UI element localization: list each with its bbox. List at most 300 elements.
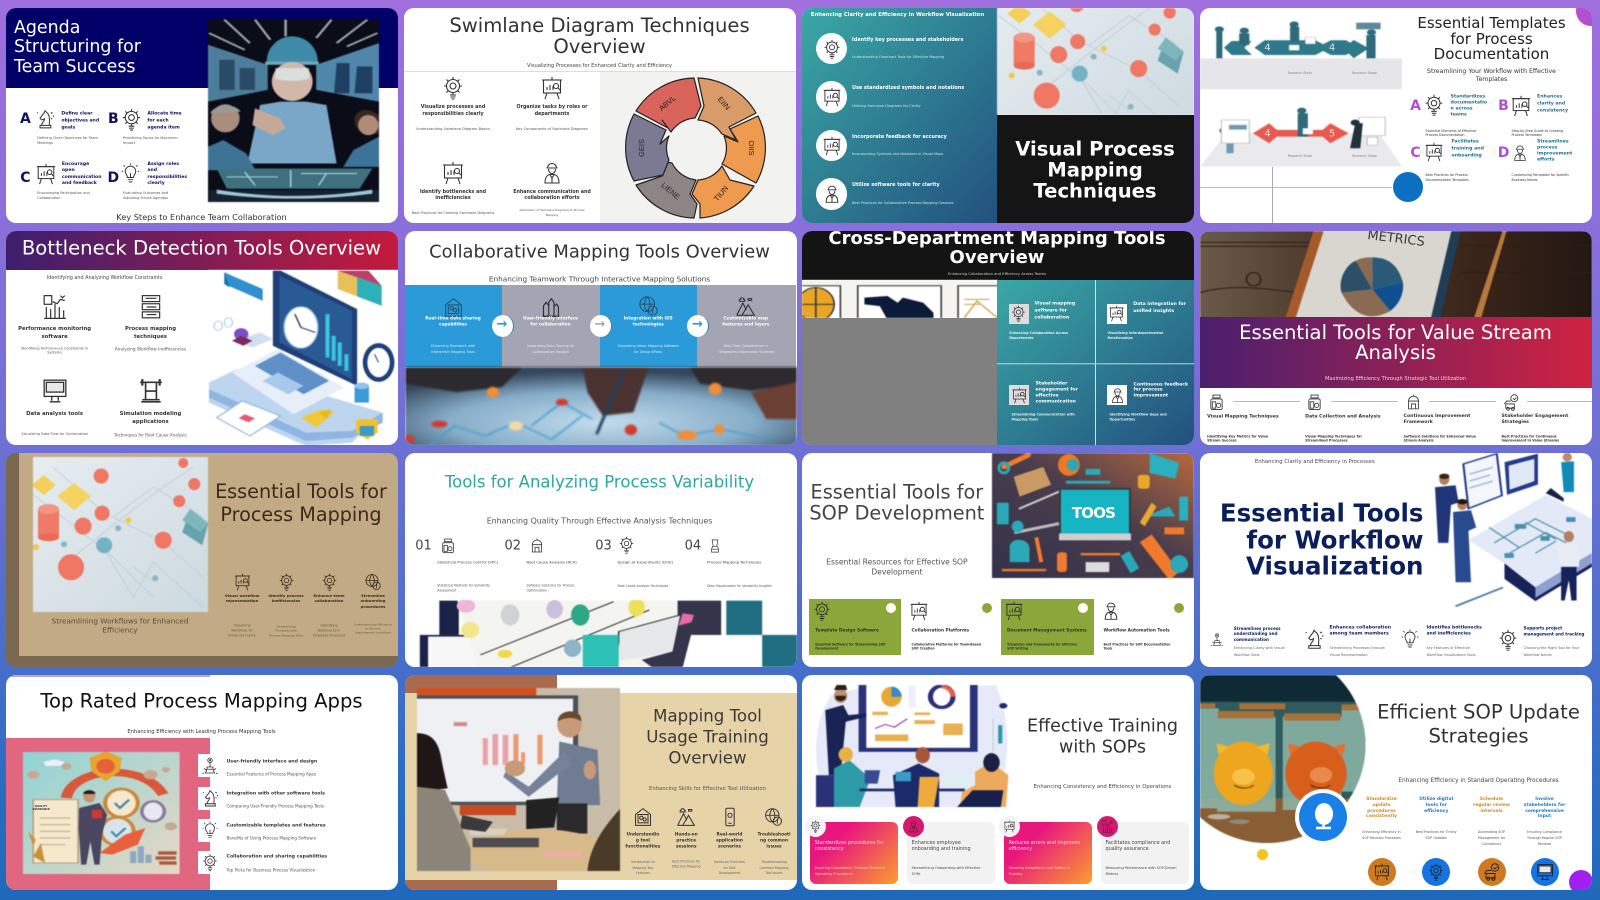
item heading: communication bbox=[1036, 399, 1076, 404]
item heading: consistency bbox=[1537, 108, 1568, 114]
column caption: Geographic Information Systems bbox=[718, 350, 774, 354]
item caption: Analyzing Workflow Inefficiencies bbox=[115, 347, 186, 352]
item heading: collaboration bbox=[1034, 316, 1069, 320]
document label bbox=[32, 805, 50, 811]
item 2 bbox=[106, 294, 196, 360]
icon circle bbox=[816, 178, 847, 210]
column caption: for Group Efforts bbox=[634, 350, 662, 354]
icon backing bbox=[198, 819, 210, 842]
icon: chess knight bbox=[36, 110, 54, 128]
globe icon bbox=[1313, 803, 1334, 831]
panel heading: Enhancing Clarity and Efficiency in Workflow Visualization bbox=[811, 12, 984, 18]
item caption: Management for bbox=[1478, 836, 1505, 840]
icon bbox=[528, 538, 546, 554]
item heading bbox=[1366, 797, 1397, 820]
item heading bbox=[675, 832, 698, 851]
item caption: Visualizing bbox=[233, 623, 250, 627]
item heading: Data Collection and Analysis bbox=[1305, 414, 1381, 420]
icon bbox=[735, 296, 756, 317]
top strip bbox=[6, 675, 210, 677]
item heading: Utilize digital bbox=[1419, 797, 1453, 802]
card heading: consistency bbox=[815, 847, 844, 853]
card heading: Facilitates compliance and bbox=[1106, 840, 1170, 846]
title: for Workflow bbox=[1246, 525, 1424, 554]
column heading: Real-time data sharing bbox=[425, 316, 481, 321]
icon bbox=[1400, 629, 1420, 650]
icon bbox=[1302, 629, 1324, 650]
icon bbox=[320, 573, 338, 591]
icon bbox=[540, 297, 561, 318]
item caption: Choosing the Right Tool for Your bbox=[1524, 646, 1579, 650]
item heading: update bbox=[1373, 803, 1390, 808]
icon bbox=[907, 820, 920, 833]
item caption: for Skill bbox=[724, 866, 735, 870]
card heading: quality assurance bbox=[1106, 847, 1149, 853]
item caption: Identifying bbox=[321, 623, 337, 627]
item heading: efficiency bbox=[1424, 809, 1448, 814]
item 2 bbox=[1305, 394, 1395, 444]
item heading bbox=[1134, 382, 1188, 399]
card caption: SOPs bbox=[912, 872, 920, 876]
item 2 bbox=[198, 787, 378, 810]
item caption: Mapping Tools bbox=[1012, 418, 1038, 422]
icon circle bbox=[1097, 816, 1118, 837]
item caption: Best Practices for Continuous bbox=[1502, 434, 1557, 438]
subtitle bbox=[52, 618, 188, 635]
item heading: procedures bbox=[361, 604, 385, 608]
icon bbox=[1101, 820, 1114, 833]
item caption: Process Templates bbox=[1512, 132, 1542, 136]
item heading: open bbox=[62, 168, 75, 173]
item heading: communication bbox=[1234, 637, 1269, 642]
item heading: and bbox=[147, 168, 157, 173]
item caption: Collaboration bbox=[37, 196, 61, 200]
subtitle: Maximizing Efficiency Through Strategic Tool Utilization bbox=[1325, 376, 1466, 382]
item heading bbox=[1419, 797, 1453, 814]
icon bbox=[442, 297, 464, 318]
item heading bbox=[18, 325, 91, 341]
icon bbox=[1108, 305, 1125, 322]
item heading: effective bbox=[1036, 393, 1059, 398]
title: Visualization bbox=[1246, 552, 1424, 581]
icon bbox=[708, 538, 722, 554]
item heading: responsibilities bbox=[147, 175, 187, 180]
image: isometric laptop dashboard bbox=[208, 270, 398, 446]
item heading: Assign roles bbox=[147, 162, 179, 167]
item heading: Incorporate feedback for accuracy bbox=[852, 134, 947, 140]
title bbox=[1417, 16, 1566, 62]
item B bbox=[108, 109, 182, 145]
column heading: Customizable map bbox=[724, 316, 768, 321]
item heading: inefficiencies bbox=[272, 598, 300, 603]
item C bbox=[20, 162, 102, 200]
icon bbox=[1536, 863, 1554, 881]
item heading bbox=[1524, 626, 1584, 638]
icon: bulb bbox=[122, 164, 140, 182]
item caption: Software Solutions for Process bbox=[526, 583, 575, 587]
panel: Training with SOPs slide bbox=[802, 675, 1194, 890]
subtitle: Enhancing Efficiency with Leading Process Mapping Tools bbox=[127, 729, 276, 735]
item B bbox=[1498, 93, 1586, 141]
title: Tools for Analyzing Process Variability bbox=[445, 473, 754, 492]
item heading: Supports project bbox=[1524, 626, 1562, 631]
item caption: Workflows for bbox=[231, 628, 253, 632]
item heading: responsibilities clearly bbox=[422, 112, 484, 117]
item 3 bbox=[1008, 385, 1094, 425]
item heading: Schedule bbox=[1480, 797, 1503, 802]
item caption: SOP Updates bbox=[1425, 836, 1447, 840]
column 2 bbox=[502, 285, 600, 366]
icon bbox=[633, 807, 653, 827]
column heading: User-friendly interface bbox=[523, 316, 578, 321]
item caption: Impact bbox=[123, 141, 135, 145]
letter: D bbox=[1498, 145, 1509, 161]
card caption: Training bbox=[1009, 872, 1022, 876]
item heading bbox=[62, 162, 102, 186]
item 4 bbox=[1502, 394, 1592, 444]
icon bbox=[542, 77, 562, 100]
item caption bbox=[1527, 830, 1562, 847]
title: Effective Training bbox=[1027, 716, 1178, 736]
column heading: features and layers bbox=[722, 322, 769, 328]
item caption bbox=[228, 623, 256, 638]
item heading: sessions bbox=[676, 845, 697, 850]
icon circle bbox=[999, 816, 1020, 837]
item caption: Through Regular SOP bbox=[1527, 836, 1562, 840]
card heading bbox=[1009, 840, 1080, 853]
item 4 bbox=[513, 163, 591, 217]
item caption: Identifying Key Metrics for Value bbox=[1207, 434, 1268, 438]
subtitle: Enhancing Teamwork Through Interactive Mapping Solutions bbox=[489, 274, 710, 283]
grey placeholder block bbox=[802, 318, 998, 446]
item caption bbox=[631, 860, 655, 876]
column caption bbox=[527, 343, 574, 355]
item caption: Workflow Needs bbox=[1524, 652, 1552, 656]
item heading: Enhance communication and bbox=[513, 190, 591, 195]
item caption bbox=[1404, 434, 1476, 443]
item 4 bbox=[352, 571, 394, 643]
item heading: collaboration bbox=[315, 598, 343, 603]
item heading: Enhances bbox=[1537, 94, 1562, 100]
banner label: 4 bbox=[1264, 128, 1271, 140]
item heading: Identify bottlenecks and bbox=[420, 190, 486, 195]
item caption bbox=[1110, 412, 1167, 423]
item caption: Enhancing Clarity with Visual bbox=[1234, 646, 1285, 650]
connector bbox=[1331, 400, 1398, 402]
item caption: Meetings bbox=[37, 141, 53, 145]
item heading: process bbox=[1537, 145, 1557, 150]
item heading: n across bbox=[1450, 106, 1473, 112]
item heading bbox=[1234, 626, 1281, 642]
item caption: Process Mapping Tools bbox=[269, 633, 303, 637]
icon backing bbox=[198, 754, 210, 777]
subtitle: Enhancing Consistency and Efficiency in Operations bbox=[1034, 784, 1171, 790]
banner label: 4 bbox=[1264, 42, 1271, 53]
number: 02 bbox=[505, 538, 521, 553]
item heading: procedures bbox=[1367, 809, 1396, 814]
item caption bbox=[1234, 645, 1285, 658]
item heading bbox=[360, 593, 386, 609]
item caption: Key Features of Effective bbox=[1426, 646, 1470, 650]
item caption: Visual Representation bbox=[1330, 652, 1368, 656]
icon circle bbox=[1478, 858, 1506, 886]
item heading bbox=[1330, 626, 1391, 638]
card caption bbox=[1009, 865, 1070, 877]
card caption: Best Practices for SOP Documentation bbox=[1104, 643, 1170, 647]
column heading bbox=[425, 316, 481, 329]
column caption: Enhancing Teamwork with bbox=[431, 344, 475, 348]
item caption: Best Practices for Creating Swimlane Diagrams bbox=[412, 211, 494, 215]
item heading bbox=[1537, 94, 1568, 114]
icon bbox=[42, 294, 68, 320]
item 2 bbox=[1410, 795, 1462, 887]
item heading: issues bbox=[766, 845, 782, 850]
card 4 bbox=[1101, 822, 1189, 884]
card 1 bbox=[809, 599, 901, 655]
chart: process cycle ring bbox=[625, 77, 766, 219]
icon bbox=[1004, 601, 1024, 621]
item heading: clearly bbox=[147, 181, 165, 186]
item D bbox=[1498, 140, 1586, 188]
icon bbox=[824, 40, 840, 59]
image: swimlane software on checker pattern bbox=[404, 600, 796, 667]
card caption bbox=[912, 865, 980, 877]
icon bbox=[138, 378, 164, 404]
plus button bbox=[982, 603, 992, 613]
icon bbox=[1422, 142, 1444, 162]
item heading: Streamlines bbox=[1537, 139, 1569, 144]
item 02 bbox=[502, 535, 587, 597]
title: Visual Process bbox=[1015, 138, 1175, 160]
item caption: Utilizing Swimlane Diagrams for Clarity bbox=[852, 104, 921, 108]
icon bbox=[908, 601, 928, 621]
purple corner bbox=[1568, 870, 1592, 894]
item caption bbox=[1009, 331, 1068, 341]
photo: presenter at whiteboard bbox=[416, 688, 620, 871]
item heading: techniques bbox=[134, 334, 167, 340]
panel: Bottleneck Detection slide bbox=[6, 230, 398, 445]
letter: B bbox=[108, 111, 119, 127]
title: with SOPs bbox=[1059, 737, 1146, 757]
card heading: Workflow Automation Tools bbox=[1104, 628, 1170, 633]
title: Techniques bbox=[1033, 180, 1157, 202]
item heading bbox=[757, 832, 791, 851]
panel: Collaborative Mapping slide bbox=[404, 230, 796, 445]
illustration: team at isometric flowchart bbox=[1434, 453, 1592, 608]
panel: Value Stream slide bbox=[1200, 230, 1592, 445]
small caption: Research Stage bbox=[1352, 71, 1377, 75]
item heading: User-friendly interface and design bbox=[226, 759, 317, 764]
item caption: Essential Elements of Effective bbox=[1426, 128, 1476, 132]
item caption: Best Practices for Process bbox=[1426, 173, 1468, 177]
item heading bbox=[225, 593, 259, 604]
item caption bbox=[1305, 434, 1362, 443]
title: Overview bbox=[668, 749, 747, 768]
item caption bbox=[1426, 645, 1476, 658]
item heading bbox=[1450, 94, 1487, 119]
panel: SOP Development slide bbox=[802, 453, 1194, 667]
item heading bbox=[716, 832, 743, 851]
card heading: Reduces errors and improves bbox=[1009, 840, 1080, 846]
title: Mapping bbox=[1047, 158, 1143, 182]
item 3 bbox=[1400, 623, 1490, 663]
item 3 bbox=[708, 803, 750, 878]
item heading: Continuous Improvement bbox=[1404, 414, 1470, 419]
item heading: Standardize bbox=[1366, 797, 1397, 802]
item heading: agenda item bbox=[147, 125, 180, 130]
item heading bbox=[1036, 382, 1078, 405]
item 1 bbox=[10, 294, 100, 360]
item caption: Business Needs bbox=[1512, 177, 1537, 181]
panel: Process Variability slide bbox=[404, 453, 796, 667]
bottom strip bbox=[6, 656, 398, 668]
item heading: application bbox=[716, 839, 743, 844]
item heading: among team members bbox=[1330, 632, 1389, 637]
arrow 2 bbox=[590, 315, 612, 337]
monitor label: TOOS bbox=[1072, 504, 1115, 522]
item heading: documentatio bbox=[1450, 100, 1487, 105]
item 4 bbox=[816, 178, 986, 210]
tan background bbox=[404, 693, 796, 880]
item heading: g tool bbox=[636, 839, 650, 844]
icon circle bbox=[805, 816, 826, 837]
item heading: Performance monitoring bbox=[18, 326, 91, 332]
title: Essential Tools bbox=[1220, 499, 1424, 528]
item heading: Process mapping bbox=[125, 326, 176, 332]
item heading: Real-world bbox=[717, 832, 742, 837]
card caption: Development bbox=[815, 647, 838, 651]
card heading: Standardizes procedures for bbox=[815, 840, 884, 846]
item 4 bbox=[1518, 795, 1570, 887]
small caption: Research Stage bbox=[1352, 154, 1377, 158]
item caption: Development bbox=[719, 871, 740, 875]
item heading: Facilitates bbox=[1452, 139, 1479, 144]
item heading: Data analysis tools bbox=[26, 410, 83, 416]
item caption: Ensuring Compliance bbox=[1527, 830, 1562, 834]
column heading: technologies bbox=[633, 322, 664, 328]
item heading: Integration with other software tools bbox=[226, 791, 325, 796]
item caption: Adjusting Future Agendas bbox=[123, 196, 168, 200]
item caption: Best Practices for Timely bbox=[1416, 830, 1457, 834]
item caption bbox=[437, 583, 490, 594]
item 4 bbox=[753, 803, 795, 878]
item caption: Step-by-Step Guide to Creating bbox=[1512, 128, 1563, 132]
item 3 bbox=[1466, 795, 1518, 887]
item caption: Streamlining Communication with bbox=[1012, 412, 1075, 416]
card caption: SOP Creation bbox=[912, 647, 935, 651]
item 01 bbox=[412, 535, 498, 597]
item caption bbox=[1108, 331, 1163, 341]
item heading: practice bbox=[676, 839, 696, 844]
subtitle: Visualizing Processes for Enhanced Clarity and Efficiency bbox=[527, 63, 672, 69]
item caption: Opportunities bbox=[1110, 418, 1135, 422]
item heading: Process Mapping Techniques bbox=[707, 559, 761, 564]
item caption bbox=[519, 208, 585, 217]
card caption: Tools bbox=[1104, 647, 1112, 651]
item heading bbox=[1537, 139, 1572, 164]
icon bbox=[1207, 394, 1226, 410]
pink panel bbox=[6, 738, 210, 890]
item caption bbox=[269, 624, 303, 637]
column 1 bbox=[404, 285, 502, 366]
item caption: Enhancing Collaboration Across bbox=[1009, 331, 1068, 335]
item caption: Comparing User-Friendly Process Mapping Tools bbox=[226, 804, 324, 808]
icon bbox=[809, 820, 822, 833]
item caption: Understanding Flowchart Tools for Effective Mapping bbox=[852, 55, 944, 59]
item heading bbox=[268, 593, 304, 604]
item heading: Visual workflow bbox=[225, 593, 259, 598]
icon box bbox=[1107, 385, 1127, 405]
subtitle: Streamlining Your Workflow with Effective bbox=[1427, 68, 1556, 75]
subtitle: Templates bbox=[1476, 76, 1507, 83]
item caption bbox=[759, 860, 789, 876]
item caption: Relationships bbox=[1108, 336, 1133, 340]
item caption: Customizing Templates for Specific bbox=[1512, 173, 1569, 177]
brown strip bottom bbox=[404, 880, 556, 890]
item caption: Best Practices for Collaborative Process Mapping Sessions bbox=[852, 201, 954, 205]
item caption bbox=[1478, 830, 1505, 847]
item caption: Visualizing Data Flow for Optimization bbox=[21, 432, 88, 436]
column heading bbox=[722, 316, 769, 329]
icon bbox=[764, 807, 784, 827]
item 3 bbox=[308, 571, 350, 643]
item caption: Statistical Methods for Variability bbox=[437, 583, 490, 587]
icon bbox=[1010, 305, 1027, 322]
item heading: Hands-on bbox=[675, 832, 698, 837]
item heading: Identifies bottlenecks bbox=[1426, 626, 1482, 631]
item caption: Workflow Tools bbox=[1234, 652, 1260, 656]
title: Bottleneck Detection Tools Overview bbox=[22, 237, 381, 260]
title: Essential Tools for bbox=[811, 480, 983, 503]
title: Usage Training bbox=[646, 728, 769, 747]
subtitle: Development bbox=[871, 567, 922, 576]
card heading: onboarding and training bbox=[912, 847, 971, 853]
right panel bbox=[600, 72, 796, 223]
icon bbox=[232, 573, 252, 591]
icon bbox=[1305, 394, 1324, 410]
item caption: Streamlining bbox=[276, 624, 296, 628]
item caption: Departments bbox=[1009, 336, 1034, 340]
item caption: Assessment bbox=[437, 589, 456, 593]
item heading: Framework bbox=[1404, 420, 1433, 425]
item heading: Stakeholder Engagement bbox=[1502, 414, 1568, 419]
card heading: Template Design Software bbox=[815, 628, 879, 633]
icon bbox=[720, 807, 740, 827]
subtitle: Identifying and Analyzing Workflow Constraints bbox=[47, 275, 162, 281]
item caption: Hands-on Exercises bbox=[714, 860, 745, 864]
item 4 bbox=[106, 378, 196, 440]
letter: A bbox=[1410, 98, 1421, 114]
column caption: Interactive Mapping Tools bbox=[431, 350, 475, 354]
item heading: Troubleshooti bbox=[757, 832, 791, 837]
item heading: regular review bbox=[1473, 803, 1510, 808]
column caption bbox=[431, 343, 475, 355]
item heading bbox=[1133, 300, 1186, 314]
icon bbox=[1427, 863, 1445, 881]
item heading bbox=[513, 189, 591, 202]
card caption: Ensuring Consistency Through Standard bbox=[815, 866, 885, 870]
item 3 bbox=[1404, 394, 1494, 444]
item caption bbox=[714, 860, 745, 876]
connector bbox=[1233, 400, 1300, 402]
item heading: communication bbox=[62, 175, 101, 180]
item heading: inefficiencies bbox=[435, 197, 471, 202]
title: Mapping Tool bbox=[653, 707, 762, 726]
item caption: Tool Issues bbox=[765, 871, 783, 875]
item caption: Systems bbox=[47, 350, 62, 354]
panel: Visual Process Mapping slide bbox=[802, 8, 1194, 222]
item heading bbox=[1524, 797, 1565, 820]
